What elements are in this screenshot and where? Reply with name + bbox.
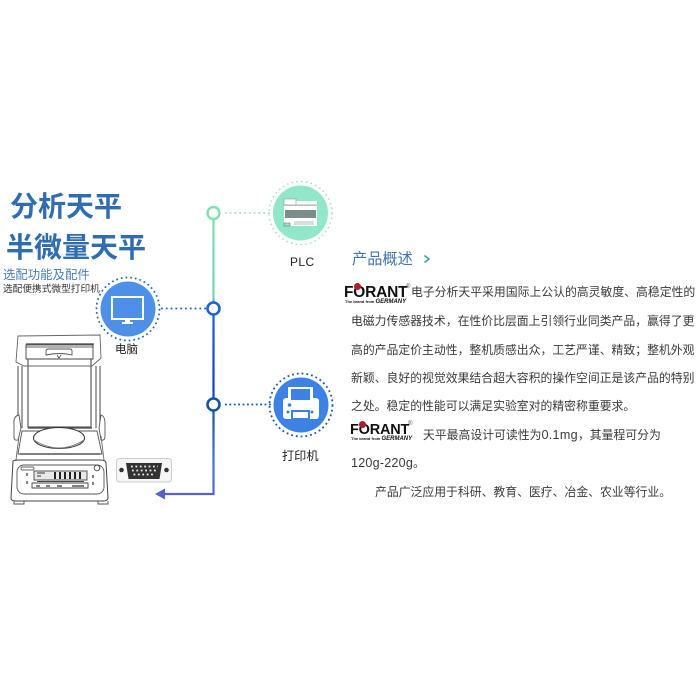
- label: printer: 打印机: [282, 449, 319, 463]
- dotted link: computer: [161, 308, 206, 310]
- body text: line 5: 之处。稳定的性能可以满足实验室对的精密称重要求。: [351, 399, 635, 413]
- title: 半微量天平: 半微量天平: [6, 232, 146, 263]
- body text: applications: 产品广泛应用于科研、教育、医疗、冶金、农业等行业。: [375, 485, 671, 499]
- body text: line 2: 电磁力传感器技术，在性价比层面上引领行业同类产品，赢得了更: [351, 314, 694, 328]
- vertical connector line with arrow: [155, 213, 214, 500]
- body text: line 4: 新颖、良好的视觉效果结合超大容积的操作空间正是该产品的特别: [351, 371, 694, 385]
- node: blue: [208, 302, 220, 314]
- node: green: [208, 207, 220, 219]
- icon: computer: [96, 278, 160, 340]
- balance side handles: [14, 415, 105, 440]
- label: computer: 电脑: [115, 344, 138, 356]
- icon: printer: [270, 374, 332, 436]
- title: 分析天平: 分析天平: [10, 191, 122, 222]
- logo: FORANT: ®: [406, 284, 410, 290]
- heading: product overview: 产品概述: [352, 251, 413, 268]
- icon: chevron: [424, 254, 430, 264]
- logo: FORANT second: [350, 420, 412, 442]
- dotted link: PLC: [225, 212, 272, 214]
- icon: PLC: [269, 182, 332, 244]
- label: PLC: PLC: [290, 255, 315, 269]
- logo: FORANT second: The brand from GERMANY: [351, 436, 412, 442]
- logo: FORANT: The brand from GERMANY: [345, 299, 406, 305]
- logo: FORANT second: FORANT: [350, 422, 409, 438]
- dotted link: printer: [225, 404, 272, 406]
- body text: readability: 天平最高设计可读性为0.1mg，其量程可分为: [423, 428, 661, 442]
- balance weighing pan: [16, 428, 104, 460]
- logo: FORANT: FORANT: [344, 284, 407, 301]
- body text: line 3: 高的产品定价主动性，整机质感出众，工艺严谨、精致；整机外观: [351, 343, 694, 357]
- icon: VGA connector: [116, 458, 172, 482]
- heading: optional accessories: 选配功能及配件: [3, 268, 90, 282]
- text: optional printer: 选配便携式微型打印机: [3, 284, 100, 295]
- illustration: analytical balance: [11, 335, 108, 504]
- body text: line 1: 电子分析天平采用国际上公认的高灵敏度、高稳定性的: [411, 285, 695, 299]
- node: dark blue: [208, 398, 220, 410]
- balance base and control panel: [11, 460, 108, 504]
- logo: FORANT second: ®: [408, 421, 412, 427]
- balance draft shield: [16, 335, 101, 428]
- body text: range: 120g-220g。: [351, 456, 425, 470]
